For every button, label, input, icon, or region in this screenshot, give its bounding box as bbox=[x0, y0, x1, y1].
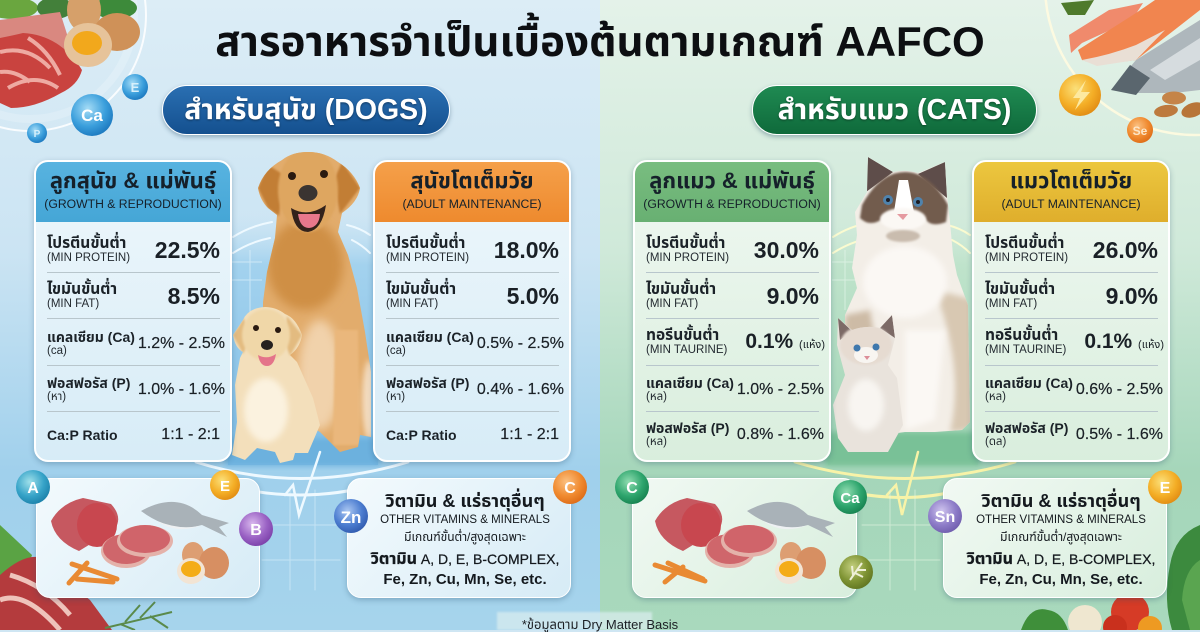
bubble: Sn bbox=[928, 499, 962, 533]
panel header: (GROWTH & REPRODUCTION) bbox=[643, 197, 821, 211]
food illustration: meat, fish, carrots, eggs bbox=[51, 498, 229, 586]
panel header bbox=[974, 162, 1168, 222]
row: fat: 8.5% bbox=[168, 283, 220, 309]
row: taurine bbox=[646, 324, 825, 356]
adult golden retriever bbox=[258, 152, 371, 452]
bubble: Ca bbox=[833, 480, 867, 514]
bubble: E orange: E bbox=[1160, 480, 1171, 497]
heading pill: dogs bbox=[162, 85, 450, 135]
row: fat: (MIN FAT) bbox=[985, 298, 1037, 310]
row: fat: 9.0% bbox=[1106, 283, 1158, 309]
row: phosphorus: (หา) bbox=[386, 391, 405, 403]
row: fat: ไขมันขั้นต่ำ bbox=[386, 281, 456, 298]
row: taurine: (MIN TAURINE) bbox=[646, 344, 727, 356]
nutrient list: Fe, Zn, Cu, Mn, Se, etc. bbox=[383, 571, 547, 588]
row: protein: โปรตีนขั้นต่ำ bbox=[386, 235, 465, 252]
panel header: (ADULT MAINTENANCE) bbox=[402, 197, 542, 211]
row: fat bbox=[985, 278, 1158, 310]
heading pill: dogs: สำหรับสุนัข (DOGS) bbox=[184, 94, 428, 126]
panel header: สุนัขโตเต็มวัย bbox=[410, 168, 534, 193]
heading pill: cats bbox=[752, 85, 1037, 135]
row: fat: 9.0% bbox=[767, 283, 819, 309]
bubble: A bbox=[16, 470, 50, 504]
row: fat bbox=[646, 278, 819, 310]
row: calcium bbox=[386, 329, 564, 357]
row: calcium: แคลเซียม (Ca) bbox=[985, 375, 1073, 391]
row: protein: 22.5% bbox=[155, 237, 220, 263]
row: protein: (MIN PROTEIN) bbox=[386, 252, 469, 264]
bubble: E: E bbox=[220, 478, 230, 495]
row: calcium bbox=[47, 329, 225, 357]
row: ratio: 1:1 - 2:1 bbox=[500, 426, 559, 443]
bubble: C bbox=[553, 470, 587, 504]
panel header: ลูกแมว & แม่พันธุ์ bbox=[649, 168, 815, 193]
row: fat: ไขมันขั้นต่ำ bbox=[985, 281, 1055, 298]
bubble: A: A bbox=[27, 480, 39, 497]
bubble: C green bbox=[615, 470, 649, 504]
bubble: B bbox=[239, 512, 273, 546]
row: protein: (MIN PROTEIN) bbox=[985, 252, 1068, 264]
panel header bbox=[375, 162, 569, 222]
row: phosphorus bbox=[386, 375, 564, 403]
floor under dogs bbox=[225, 438, 380, 466]
panel: kittens growth and reproduction bbox=[633, 160, 831, 462]
nutrient list bbox=[966, 551, 1155, 588]
note: มีเกณฑ์ขั้นต่ำ/สูงสุดเฉพาะ bbox=[1000, 530, 1122, 544]
bottom-left food: meat and rosemary bbox=[0, 525, 172, 630]
panel: dog food ingredients bbox=[36, 478, 260, 598]
nutrient list: วิตามิน A, D, E, B-COMPLEX, bbox=[371, 551, 559, 568]
row: phosphorus: ฟอสฟอรัส (P) bbox=[47, 375, 130, 391]
row: fat bbox=[386, 278, 559, 310]
panel: adult cats bbox=[972, 160, 1170, 462]
golden retriever puppy bbox=[232, 307, 320, 463]
row: taurine: 0.1% (แห้ง) bbox=[745, 330, 825, 353]
row: fat: 5.0% bbox=[507, 283, 559, 309]
background: dogs side bbox=[0, 0, 600, 630]
row: phosphorus: (ดล) bbox=[985, 436, 1006, 448]
row: phosphorus bbox=[646, 420, 824, 448]
row: protein bbox=[47, 232, 220, 264]
glow arcs behind cats bbox=[795, 222, 1015, 590]
row: phosphorus: 0.8% - 1.6% bbox=[737, 426, 824, 443]
adult ragdoll cat bbox=[845, 157, 970, 433]
backdrop behind dogs bbox=[228, 215, 378, 465]
panel header: ลูกสุนัข & แม่พันธุ์ bbox=[50, 168, 216, 193]
row: protein: โปรตีนขั้นต่ำ bbox=[985, 235, 1064, 252]
row: ratio bbox=[386, 426, 559, 443]
floor under cats bbox=[825, 432, 980, 466]
row: phosphorus: ฟอสฟอรัส (P) bbox=[646, 420, 729, 436]
bubble: herb bbox=[839, 555, 873, 589]
glow rings behind the top corners bbox=[0, 0, 1200, 135]
bubbles: top-left minerals bbox=[27, 74, 148, 143]
row: phosphorus: ฟอสฟอรัส (P) bbox=[985, 420, 1068, 436]
row: taurine bbox=[985, 324, 1164, 356]
bubble: B: B bbox=[250, 522, 262, 539]
row: fat: (MIN FAT) bbox=[646, 298, 698, 310]
ragdoll kitten bbox=[833, 315, 903, 452]
food illustration: meat, fish, carrots, eggs bbox=[652, 498, 835, 584]
row: fat: (MIN FAT) bbox=[47, 298, 99, 310]
grid behind pets bbox=[232, 250, 856, 320]
row: protein: (MIN PROTEIN) bbox=[646, 252, 729, 264]
footnote strip bbox=[497, 612, 652, 630]
row: calcium bbox=[985, 375, 1163, 403]
row: protein bbox=[646, 232, 819, 264]
nutrient list: วิตามิน A, D, E, B-COMPLEX, bbox=[967, 551, 1155, 568]
row: protein: (MIN PROTEIN) bbox=[47, 252, 130, 264]
bubble: C green: C bbox=[626, 480, 638, 497]
row: phosphorus: 0.4% - 1.6% bbox=[477, 381, 564, 398]
bubble: Sn: Sn bbox=[935, 509, 955, 526]
panel: cat food ingredients bbox=[632, 478, 857, 598]
row: calcium: 0.6% - 2.5% bbox=[1076, 381, 1163, 398]
panel: cat vitamins and minerals bbox=[943, 478, 1167, 598]
row: ratio: Ca:P Ratio bbox=[47, 427, 118, 443]
panel: adult dogs bbox=[373, 160, 571, 462]
top-left food: meat, eggs, greens bbox=[0, 0, 140, 108]
bubble: Zn bbox=[334, 499, 368, 533]
row: fat bbox=[47, 278, 220, 310]
row: calcium: (ca) bbox=[386, 345, 406, 357]
row: phosphorus bbox=[47, 375, 225, 403]
bubbles: top-right energy and selenium: Se bbox=[1133, 124, 1148, 138]
bubble: C: C bbox=[564, 480, 576, 497]
panel header bbox=[36, 162, 230, 222]
subheading: OTHER VITAMINS & MINERALS bbox=[380, 514, 550, 526]
row: ratio: Ca:P Ratio bbox=[386, 427, 457, 443]
row: protein bbox=[985, 232, 1158, 264]
row: calcium: (หล) bbox=[985, 391, 1006, 403]
bubbles: top-right energy and selenium bbox=[1059, 74, 1153, 143]
row: taurine: ทอรีนขั้นต่ำ bbox=[985, 327, 1058, 344]
glow arcs behind dogs bbox=[196, 222, 408, 590]
panel header: แมวโตเต็มวัย bbox=[1010, 168, 1132, 193]
row: fat: ไขมันขั้นต่ำ bbox=[47, 281, 117, 298]
footnote: *ข้อมูลตาม Dry Matter Basis bbox=[522, 617, 678, 632]
row: fat: ไขมันขั้นต่ำ bbox=[646, 281, 716, 298]
row: calcium: แคลเซียม (Ca) bbox=[386, 329, 474, 345]
row: phosphorus: (หล) bbox=[646, 436, 667, 448]
panel: dog vitamins and minerals bbox=[347, 478, 571, 598]
panel header: (ADULT MAINTENANCE) bbox=[1001, 197, 1141, 211]
row: protein: โปรตีนขั้นต่ำ bbox=[646, 235, 725, 252]
row: ratio bbox=[47, 426, 220, 443]
bubble: Ca: Ca bbox=[840, 490, 860, 507]
row: phosphorus: ฟอสฟอรัส (P) bbox=[386, 375, 469, 391]
nutrient list bbox=[370, 551, 559, 588]
bubble: Zn: Zn bbox=[341, 508, 361, 527]
row: calcium: 1.0% - 2.5% bbox=[737, 381, 824, 398]
bubbles: top-left minerals: P bbox=[34, 129, 41, 140]
background: cats side bbox=[600, 0, 1200, 630]
row: calcium: แคลเซียม (Ca) bbox=[47, 329, 135, 345]
row: phosphorus bbox=[985, 420, 1163, 448]
row: protein: โปรตีนขั้นต่ำ bbox=[47, 235, 126, 252]
row: calcium: (หล) bbox=[646, 391, 667, 403]
row: phosphorus: 0.5% - 1.6% bbox=[1076, 426, 1163, 443]
row: protein: 26.0% bbox=[1093, 237, 1158, 263]
row: calcium bbox=[646, 375, 824, 403]
row: ratio: 1:1 - 2:1 bbox=[161, 426, 220, 443]
title: สารอาหารจำเป็นเบื้องต้นตามเกณฑ์ AAFCO bbox=[215, 18, 985, 65]
row: calcium: แคลเซียม (Ca) bbox=[646, 375, 734, 391]
row: phosphorus: 1.0% - 1.6% bbox=[138, 381, 225, 398]
row: taurine: ทอรีนขั้นต่ำ bbox=[646, 327, 719, 344]
bubbles: top-left minerals: Ca bbox=[81, 106, 103, 125]
bubble: E bbox=[210, 470, 240, 500]
row: protein: 18.0% bbox=[494, 237, 559, 263]
row: calcium: (ca) bbox=[47, 345, 67, 357]
row: phosphorus: (หา) bbox=[47, 391, 66, 403]
subheading: OTHER VITAMINS & MINERALS bbox=[976, 514, 1146, 526]
heading: วิตามิน & แร่ธาตุอื่นๆ bbox=[981, 491, 1141, 511]
heading pill: cats: สำหรับแมว (CATS) bbox=[778, 94, 1011, 126]
note: มีเกณฑ์ขั้นต่ำ/สูงสุดเฉพาะ bbox=[404, 530, 526, 544]
row: fat: (MIN FAT) bbox=[386, 298, 438, 310]
panel header bbox=[635, 162, 829, 222]
nutrient list: Fe, Zn, Cu, Mn, Se, etc. bbox=[979, 571, 1143, 588]
heading: วิตามิน & แร่ธาตุอื่นๆ bbox=[385, 491, 545, 511]
panel header: (GROWTH & REPRODUCTION) bbox=[44, 197, 222, 211]
row: calcium: 1.2% - 2.5% bbox=[138, 335, 225, 352]
bubble: E orange bbox=[1148, 470, 1182, 504]
row: protein: 30.0% bbox=[754, 237, 819, 263]
bubbles: top-left minerals: E bbox=[131, 80, 140, 95]
panel: puppies growth and reproduction bbox=[34, 160, 232, 462]
backdrop behind cats bbox=[828, 215, 978, 465]
top-right food: salmon, fish, almonds bbox=[1061, 0, 1200, 121]
row: taurine: 0.1% (แห้ง) bbox=[1084, 330, 1164, 353]
row: protein bbox=[386, 232, 559, 264]
bottom-right food: spinach, tomato, onion, lettuce bbox=[1021, 525, 1200, 632]
row: taurine: (MIN TAURINE) bbox=[985, 344, 1066, 356]
row: calcium: 0.5% - 2.5% bbox=[477, 335, 564, 352]
